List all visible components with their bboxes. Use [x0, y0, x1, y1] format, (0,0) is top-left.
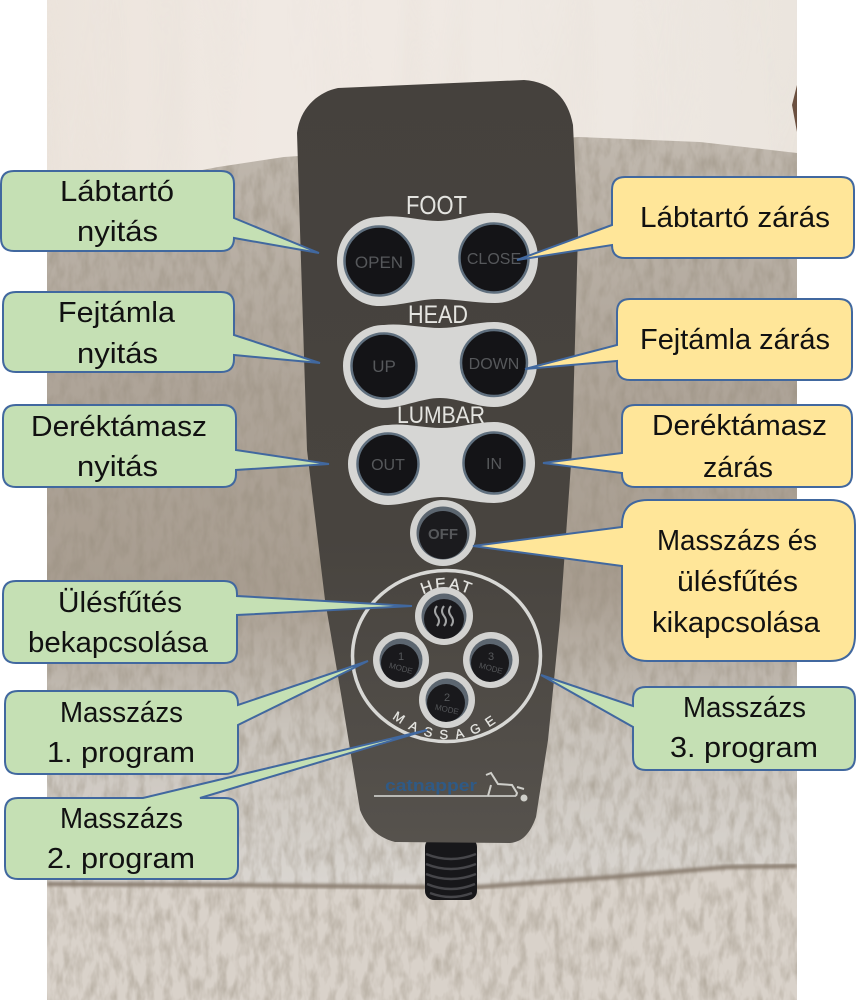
- open button: OPEN: [355, 253, 403, 272]
- callout: footrest open: [1, 171, 319, 253]
- callout: lumbar open: nyitás: [77, 451, 158, 483]
- in button: [464, 432, 524, 494]
- mode 3 button: [463, 632, 519, 688]
- callout: lumbar close: zárás: [703, 452, 773, 484]
- mode 2 button: MODE: [434, 703, 460, 716]
- out button: OUT: [371, 457, 405, 474]
- mode 3 button: MODE: [478, 661, 504, 676]
- callout: seat heating on: bekapcsolása: [28, 627, 209, 659]
- off button: OFF: [428, 526, 458, 543]
- close button: [460, 224, 528, 292]
- callout: massage and heat off: [473, 500, 855, 661]
- down button: [461, 330, 527, 396]
- callout: footrest open: nyitás: [77, 216, 158, 248]
- callout: lumbar open: [3, 405, 329, 487]
- foot button group: [337, 213, 538, 306]
- remote cord: [425, 838, 477, 900]
- mode 2 button: [419, 672, 475, 728]
- callout: headrest open: Fejtámla: [58, 297, 176, 329]
- head button group: [343, 322, 537, 408]
- brand logo: [374, 773, 528, 802]
- heat and massage ring: [350, 568, 542, 744]
- callout: massage program 3: 3. program: [670, 732, 818, 764]
- callout: massage and heat off: ülésfűtés: [677, 566, 798, 598]
- remote body: [297, 80, 578, 843]
- massage label: MASSAGE: [392, 711, 496, 740]
- callout: massage and heat off: kikapcsolása: [652, 607, 821, 639]
- up button: [352, 334, 416, 398]
- callout: massage program 3: [541, 675, 855, 770]
- callout: headrest open: nyitás: [77, 338, 158, 370]
- callout: massage program 2: 2. program: [47, 843, 195, 875]
- head label: HEAD: [408, 301, 468, 329]
- mode 1 button: 1: [398, 651, 404, 663]
- heat button: [415, 587, 473, 645]
- callout: headrest open: [3, 292, 320, 372]
- up button: UP: [372, 357, 396, 376]
- lumbar label: LUMBAR: [397, 402, 485, 429]
- open button: [344, 226, 414, 296]
- callout: massage program 3: Masszázs: [683, 692, 806, 724]
- callout: lumbar close: Deréktámasz: [652, 410, 827, 442]
- callout: seat heating on: Ülésfűtés: [58, 587, 182, 619]
- in button: IN: [486, 456, 502, 473]
- callout: headrest close: [525, 299, 852, 380]
- callout: massage program 2: Masszázs: [60, 803, 183, 835]
- callout: footrest close: [517, 177, 854, 260]
- mode 1 button: [373, 632, 429, 688]
- callout: massage program 1: 1. program: [47, 737, 195, 769]
- callout: lumbar open: Deréktámasz: [31, 411, 207, 443]
- callout: seat heating on: [3, 581, 412, 663]
- callout: massage program 1: Masszázs: [60, 697, 183, 729]
- mode 2 button: 2: [444, 692, 450, 704]
- callout: footrest open: Lábtartó: [60, 176, 174, 208]
- remote control: [297, 80, 578, 843]
- off button: [410, 500, 476, 566]
- close button: CLOSE: [467, 251, 521, 268]
- out button: [358, 434, 418, 494]
- mode 3 button: 3: [488, 651, 494, 663]
- brand logo: catnapper: [385, 776, 477, 795]
- callout: massage and heat off: Masszázs és: [657, 525, 817, 557]
- callout: massage program 1: [5, 661, 368, 774]
- lumbar button group: [348, 422, 535, 505]
- callout: massage program 2: [5, 730, 427, 879]
- down button: DOWN: [469, 356, 519, 373]
- heat label: HEAT: [420, 578, 473, 594]
- mode 1 button: MODE: [388, 661, 414, 676]
- callout: headrest close: Fejtámla zárás: [640, 324, 830, 356]
- foot label: FOOT: [406, 190, 467, 220]
- callout: lumbar close: [543, 405, 852, 487]
- callout: footrest close: Lábtartó zárás: [640, 202, 830, 234]
